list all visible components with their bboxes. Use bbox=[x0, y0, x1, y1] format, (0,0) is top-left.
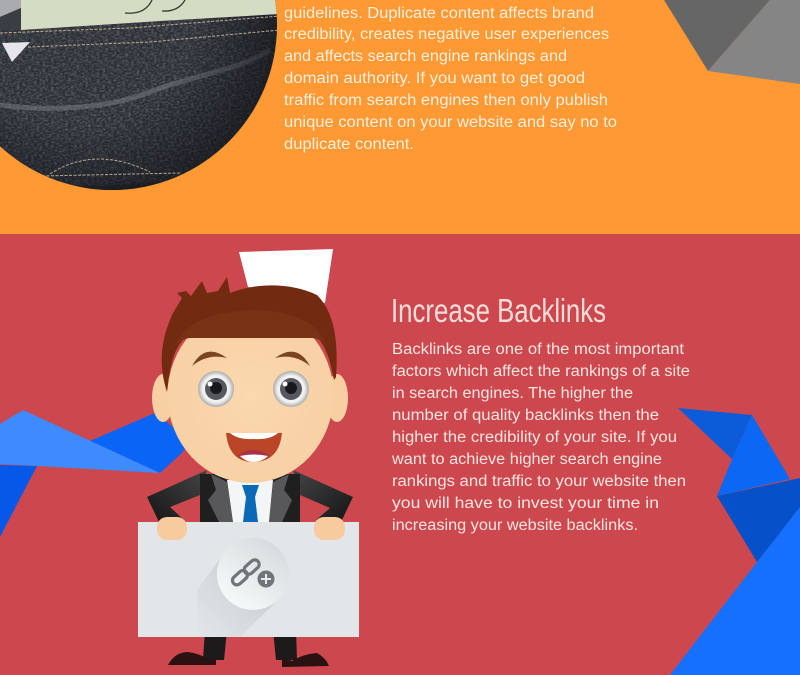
text block: duplicate content body: guidelines. Duplicate content affects brand bbox=[284, 5, 594, 22]
eyebrows bbox=[192, 352, 310, 366]
text block: backlinks body: you will have to invest your time in bbox=[392, 495, 659, 512]
text block: backlinks body bbox=[391, 341, 690, 534]
text block: backlinks body: in search engines. The higher the bbox=[392, 385, 633, 402]
text block: backlinks body: number of quality backlinks then the bbox=[392, 407, 659, 424]
decoration: blue origami left bbox=[0, 410, 190, 537]
icon: link plus disc bbox=[217, 538, 289, 610]
text block: duplicate content body: domain authority. If you want to get good bbox=[284, 70, 585, 87]
photo: jeans pocket with money bbox=[0, 0, 290, 200]
shoes bbox=[168, 652, 329, 667]
panel: increase backlinks (red) bbox=[0, 234, 800, 675]
text block: duplicate content body: credibility, creates negative user experiences bbox=[284, 26, 609, 43]
text block: backlinks body: want to achieve higher search engine bbox=[391, 451, 662, 468]
hair bbox=[162, 277, 337, 392]
character: businessman holding sign bbox=[138, 277, 359, 667]
ears bbox=[152, 374, 348, 422]
hands bbox=[157, 517, 345, 540]
legs bbox=[203, 630, 297, 660]
text block: backlinks body: Backlinks are one of the most important bbox=[392, 341, 685, 358]
text block: backlinks body: higher the credibility of your site. If you bbox=[392, 429, 677, 446]
decoration: white pennant bbox=[239, 249, 333, 303]
mouth bbox=[226, 433, 282, 462]
text block: duplicate content body: traffic from search engines then only publish bbox=[284, 92, 608, 109]
decoration: grey origami shapes bbox=[664, 0, 800, 84]
text block: duplicate content body bbox=[284, 5, 617, 153]
text block: duplicate content body: unique content on your website and say no to bbox=[284, 114, 617, 131]
eye: right bbox=[273, 371, 309, 407]
decoration: blue origami right bbox=[670, 408, 800, 675]
text block: duplicate content body: and affects search engine rankings and bbox=[284, 48, 567, 65]
heading: increase backlinks: Increase Backlinks bbox=[391, 292, 606, 329]
text block: backlinks body: factors which affect the rankings of a site bbox=[392, 363, 690, 380]
text block: backlinks body: rankings and traffic to your website then bbox=[392, 473, 686, 490]
text block: duplicate content body: duplicate content. bbox=[284, 136, 414, 153]
face bbox=[168, 307, 334, 483]
text block: backlinks body: increasing your website backlinks. bbox=[392, 517, 638, 534]
panel: duplicate content (orange) bbox=[0, 0, 800, 234]
sign board bbox=[138, 522, 359, 637]
eye: left bbox=[198, 371, 234, 407]
tie bbox=[242, 485, 259, 522]
suit bbox=[147, 470, 353, 525]
